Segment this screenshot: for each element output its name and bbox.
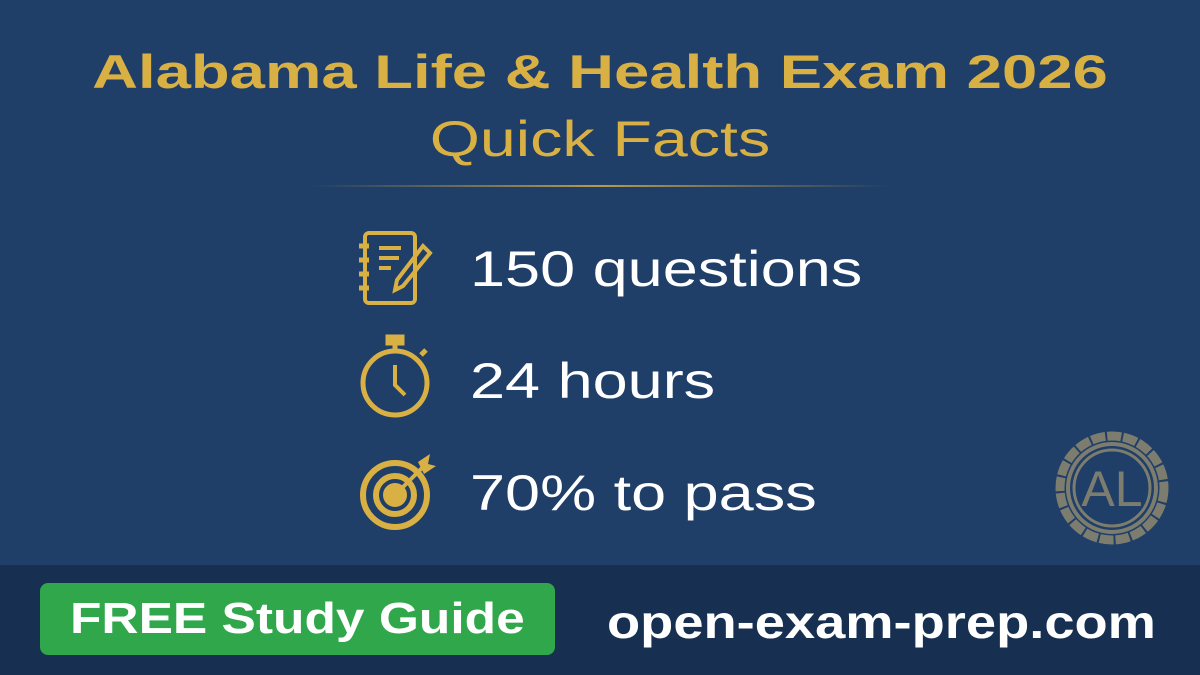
icon: target (360, 454, 436, 530)
icon: AL seal (1056, 432, 1168, 544)
icon: stopwatch (360, 334, 430, 418)
icon: AL seal: AL (1081, 461, 1143, 517)
text: pass: 70% to pass (470, 465, 817, 521)
bottom bar (0, 565, 1200, 675)
text: questions: 150 questions (470, 241, 862, 297)
text: hours: 24 hours (470, 353, 715, 409)
button: free study guide (40, 583, 555, 655)
icon: notebook (359, 231, 433, 305)
subtitle: Quick Facts (430, 111, 770, 167)
url: open-exam-prep.com (607, 596, 1156, 648)
title: Alabama Life & Health Exam 2026 (92, 45, 1108, 98)
button: free study guide: FREE Study Guide (70, 594, 525, 643)
